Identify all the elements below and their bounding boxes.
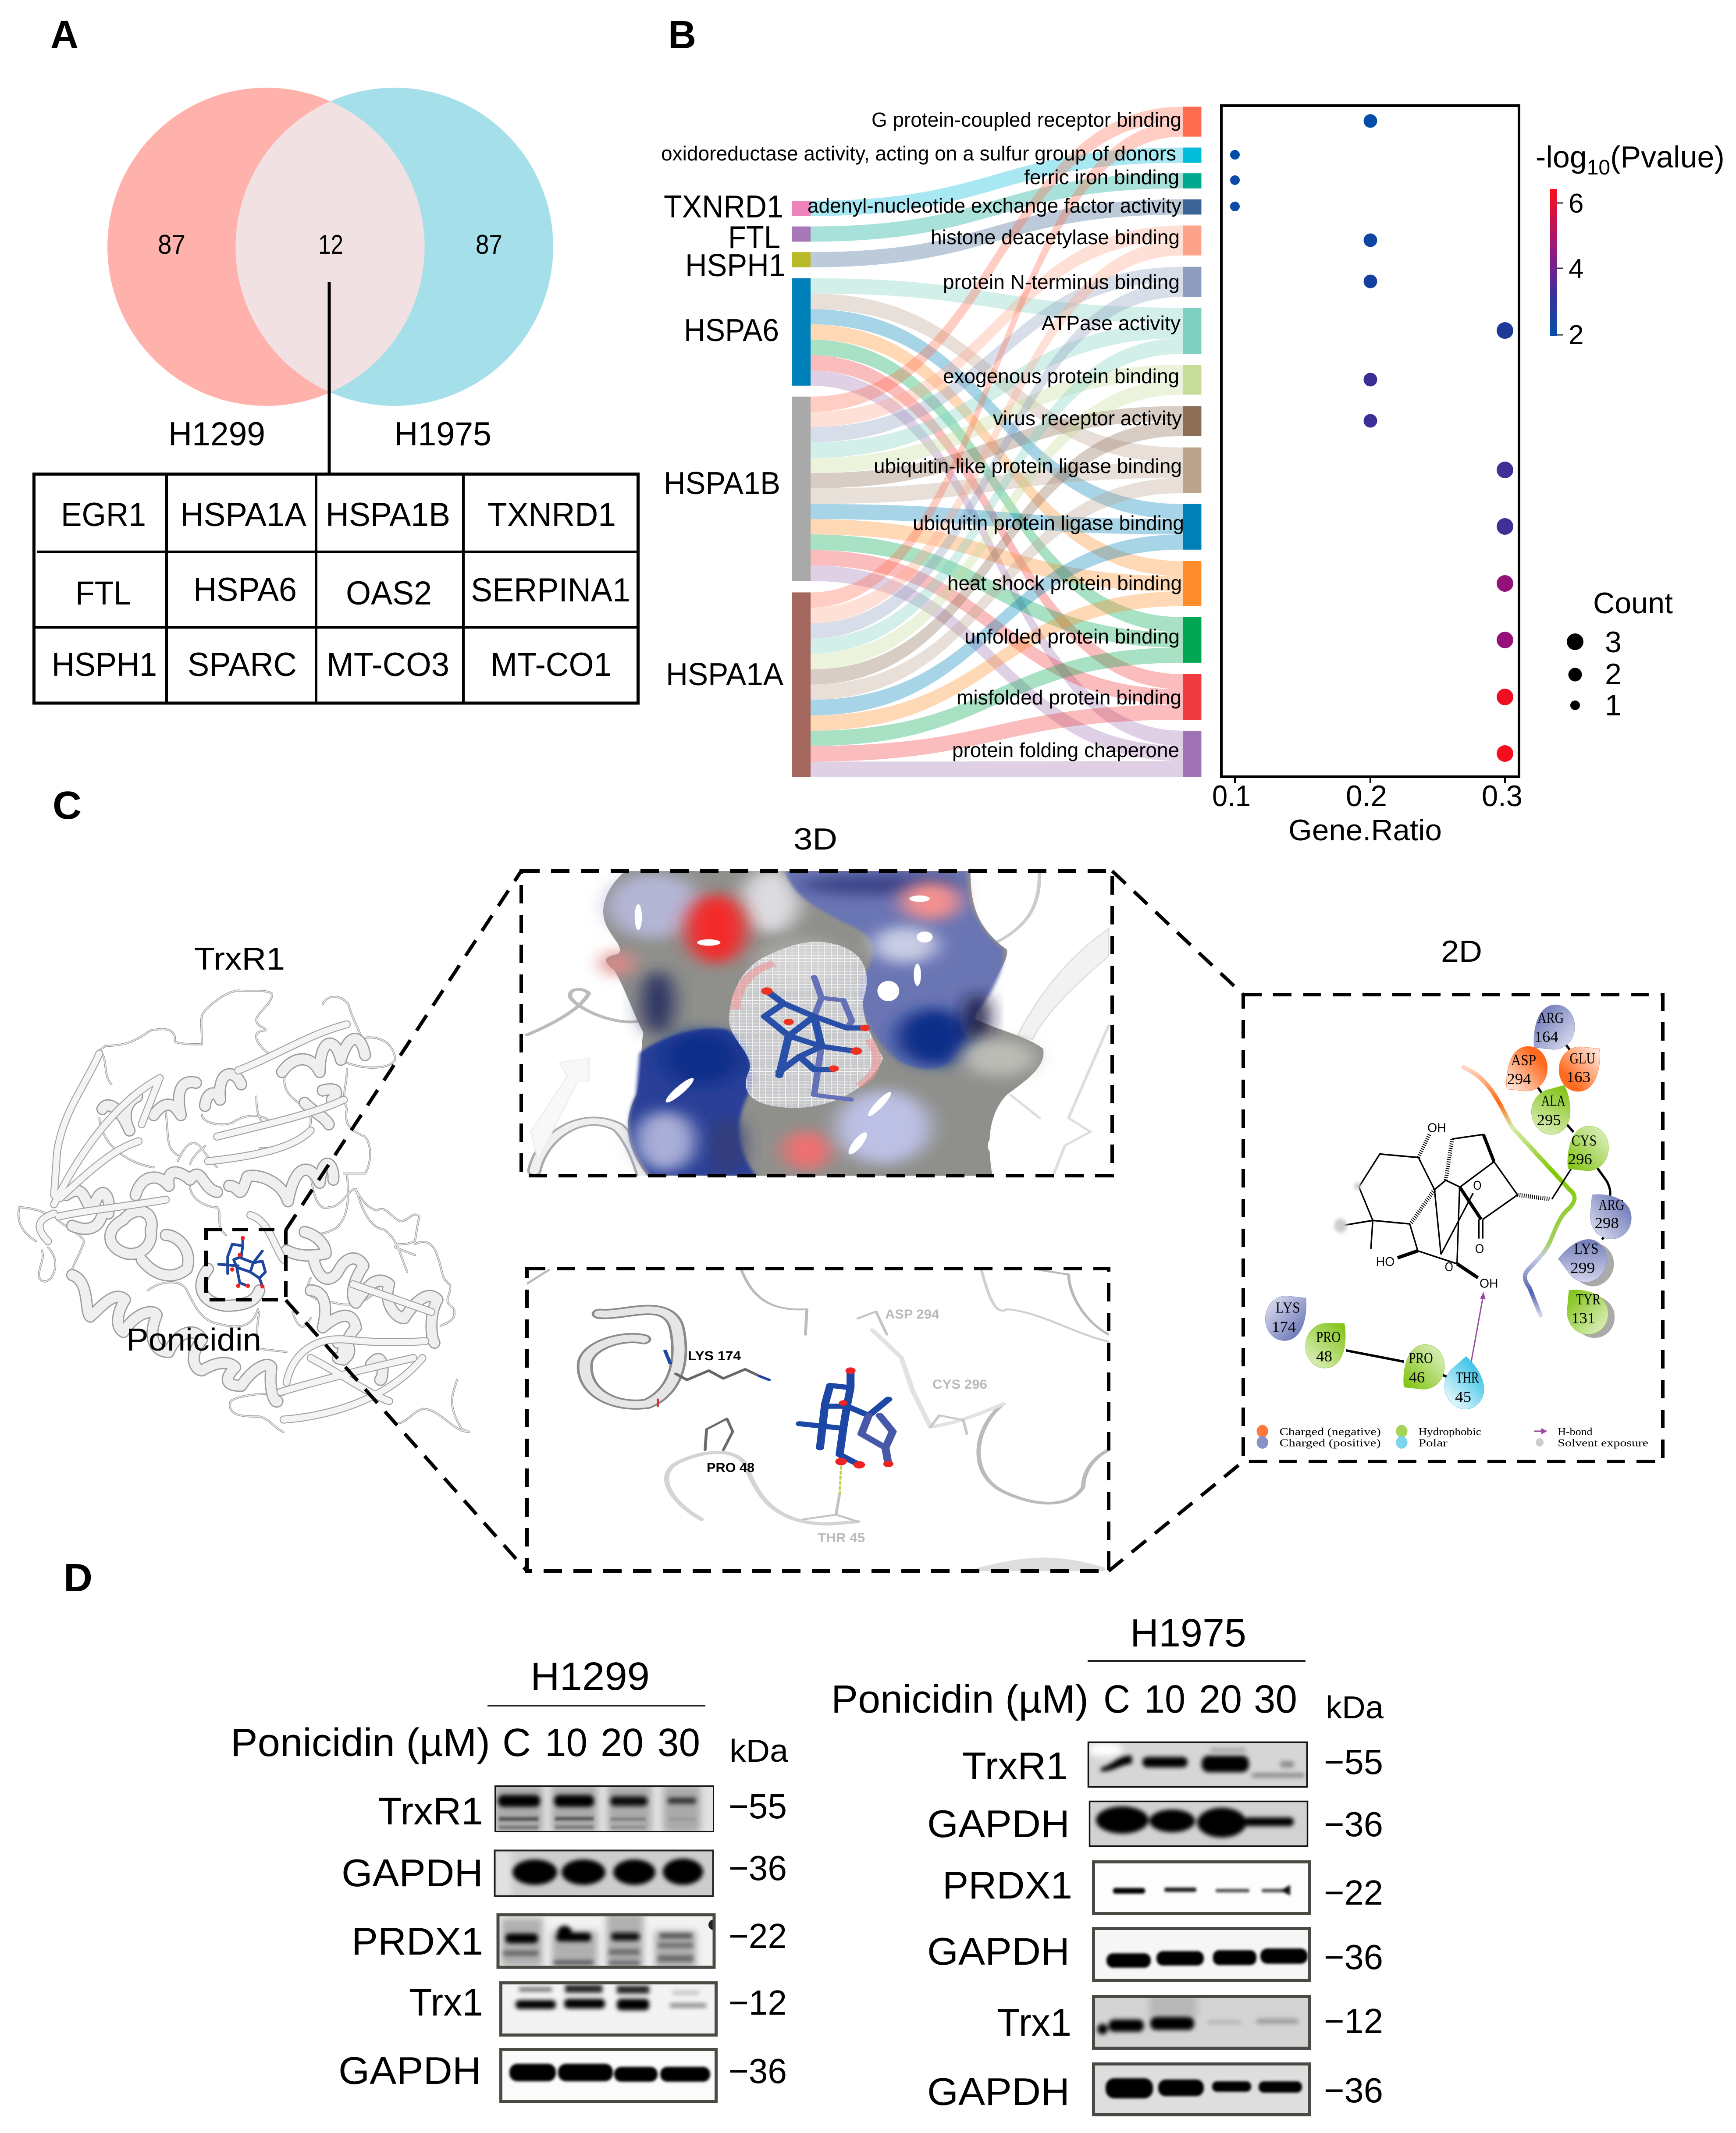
ligand atom labels: OH [1480, 1276, 1498, 1290]
residue labels: LYS 174 [688, 1349, 741, 1363]
detail box outline [527, 1269, 1109, 1571]
sankey term labels: protein folding chaperone [952, 739, 1179, 761]
gene table: MT-CO1 [491, 646, 612, 683]
row labels: GAPDH [338, 2049, 481, 2092]
header H1975 [831, 1611, 1384, 1725]
gene table: HSPA1B [326, 496, 450, 533]
2D legend: H-bond [1558, 1426, 1593, 1437]
sankey term labels: protein N-terminus binding [943, 270, 1180, 293]
x axis labels [1212, 779, 1523, 813]
gene table: HSPA1A [180, 496, 306, 533]
panel D: H1299 western blots [231, 1655, 789, 2103]
kDa markers: −12 [729, 1983, 787, 2022]
sankey gene nodes [792, 201, 811, 777]
kDa markers: −36 [729, 1849, 787, 1888]
gene table: HSPH1 [52, 646, 157, 683]
blot TrxR1 [1088, 1742, 1308, 1788]
residues: TYR [1576, 1291, 1601, 1308]
sankey gene labels: HSPA1A [666, 657, 783, 692]
row labels: Trx1 [997, 2001, 1071, 2044]
residues [1265, 1005, 1631, 1418]
x axis labels: 0.1 [1212, 779, 1251, 813]
sankey term labels: heat shock protein binding [947, 572, 1182, 594]
ligand atom labels: O [1445, 1260, 1453, 1274]
header H1299: C [502, 1721, 531, 1765]
2D legend: Polar [1419, 1437, 1448, 1448]
row labels: TrxR1 [962, 1744, 1068, 1788]
residue connections [1346, 1041, 1610, 1379]
residues: 163 [1566, 1069, 1590, 1086]
panel letter C: C [53, 784, 82, 828]
ligand zoom box [206, 1230, 286, 1300]
sankey term labels: ferric iron binding [1024, 166, 1179, 188]
2D box outline [1243, 995, 1663, 1461]
sankey term labels: ATPase activity [1042, 312, 1181, 334]
dot plot frame [1221, 106, 1519, 777]
blot TrxR1 [494, 1785, 714, 1832]
sankey term labels: histone deacetylase binding [931, 226, 1180, 249]
colour bar [1550, 188, 1583, 350]
blot Trx1 [499, 1981, 718, 2037]
blot GAPDH [494, 1850, 714, 1897]
gene table: MT-CO3 [327, 646, 449, 683]
zoom connector lines [286, 871, 1243, 1571]
size legend: 3 [1605, 626, 1622, 659]
panel B: dot plot [1212, 106, 1725, 847]
residue labels [688, 1307, 987, 1545]
H-bond arrow [1471, 1292, 1486, 1364]
sankey term labels: misfolded protein binding [957, 686, 1181, 709]
header H1975: C [1103, 1678, 1130, 1721]
residues: 46 [1409, 1369, 1425, 1386]
sankey term labels: adenyl-nucleotide exchange factor activity [808, 194, 1181, 217]
colour legend title: (Pvalue) [1610, 140, 1725, 174]
colour legend title: -log [1536, 140, 1587, 174]
ligand sticks [800, 1367, 893, 1468]
2D legend: Solvent exposure [1558, 1437, 1648, 1448]
residues: PRO [1409, 1350, 1433, 1367]
residue labels: ASP 294 [885, 1307, 939, 1322]
header H1299: Ponicidin (µM) [231, 1721, 490, 1765]
label 3D: 3D [793, 822, 837, 856]
residues: ALA [1541, 1092, 1565, 1109]
sankey term labels: ubiquitin-like protein ligase binding [874, 455, 1182, 477]
sankey term labels: oxidoreductase activity, acting on a sulfur group of donors [661, 142, 1176, 165]
kDa markers [729, 1787, 787, 2090]
size legend: 2 [1605, 658, 1622, 691]
residues: 48 [1316, 1348, 1332, 1365]
residue labels: THR 45 [818, 1531, 865, 1545]
residue labels: PRO 48 [707, 1461, 754, 1475]
colour bar: 2 [1569, 320, 1583, 350]
kDa markers: −36 [729, 2051, 787, 2090]
size legend: Count [1593, 587, 1673, 620]
header H1299: 10 [545, 1721, 587, 1765]
residues: 131 [1571, 1310, 1595, 1327]
ligand atom labels: OH [1427, 1120, 1446, 1135]
kDa markers: −22 [729, 1916, 787, 1955]
row labels: TrxR1 [378, 1789, 483, 1833]
protein structure TrxR1 [18, 991, 469, 1432]
residues: 174 [1272, 1319, 1296, 1336]
ligand atom labels: O [1473, 1178, 1481, 1192]
sankey term nodes [1183, 107, 1201, 777]
panel D: H1975 western blots [831, 1611, 1384, 2116]
residues: 164 [1534, 1029, 1558, 1045]
blot GAPDH [499, 2048, 718, 2103]
2D legend: Charged (negative) [1280, 1426, 1381, 1437]
binding site detail view [527, 1269, 1109, 1571]
sankey term labels: unfolded protein binding [964, 625, 1180, 648]
2D legend [1257, 1425, 1648, 1449]
panel letter D: D [64, 1556, 92, 1600]
residues: 45 [1455, 1389, 1471, 1405]
sankey gene labels: HSPA1B [664, 466, 780, 501]
ligand mesh [729, 942, 883, 1108]
row labels: Trx1 [409, 1980, 483, 2024]
header H1299 [231, 1655, 789, 1769]
row labels: PRDX1 [352, 1920, 483, 1963]
kDa markers: −55 [729, 1787, 787, 1826]
row labels: PRDX1 [943, 1863, 1072, 1907]
surface shading [602, 869, 1036, 1176]
3D box outline [521, 871, 1112, 1176]
label TrxR1: TrxR1 [194, 942, 285, 977]
sankey gene labels: TXNRD1 [664, 189, 783, 224]
label Ponicidin: Ponicidin [126, 1322, 261, 1358]
row labels: GAPDH [342, 1851, 483, 1895]
residues: LYS [1276, 1300, 1300, 1316]
gene table: FTL [75, 575, 131, 612]
venn diagram: 87 [476, 230, 502, 260]
gene table: OAS2 [346, 575, 432, 612]
header H1975: 20 [1199, 1678, 1242, 1721]
gene table: TXNRD1 [487, 496, 616, 533]
header H1299: 20 [601, 1721, 644, 1765]
ligand in protein [219, 1236, 265, 1289]
sankey gene labels [664, 189, 786, 692]
residues: GLU [1569, 1050, 1595, 1067]
residues: ARG [1537, 1010, 1564, 1027]
residues: PRO [1316, 1329, 1341, 1346]
ligand sticks [761, 977, 870, 1099]
residues: 296 [1568, 1151, 1592, 1168]
kDa markers: −36 [1324, 1937, 1383, 1977]
gene table [34, 474, 638, 703]
dots [1230, 114, 1513, 762]
sankey term labels [661, 108, 1184, 761]
sankey gene labels: HSPA6 [684, 313, 779, 348]
residues: ASP [1511, 1052, 1536, 1069]
residues: 299 [1570, 1260, 1595, 1276]
kDa markers: −36 [1324, 2071, 1383, 2110]
ligand atom labels: O [1475, 1241, 1484, 1256]
panel letter A: A [50, 13, 78, 57]
residues: ARG [1598, 1197, 1624, 1214]
header H1975: 10 [1144, 1678, 1185, 1721]
panel B: sankey diagram [661, 107, 1201, 777]
kDa markers: −36 [1324, 1805, 1383, 1844]
2D legend: Charged (positive) [1280, 1437, 1381, 1448]
x axis title: Gene.Ratio [1288, 814, 1442, 847]
label 2D: 2D [1441, 934, 1482, 968]
panel letter B: B [668, 13, 696, 57]
sankey term labels: exogenous protein binding [943, 365, 1179, 387]
header H1975: 30 [1254, 1678, 1297, 1721]
label H1975: H1975 [394, 416, 491, 453]
sankey term labels: G protein-coupled receptor binding [872, 108, 1181, 131]
colour legend title: 10 [1587, 156, 1610, 179]
header H1299: kDa [729, 1734, 789, 1769]
residues: THR [1456, 1369, 1479, 1386]
sankey gene labels: FTL [728, 220, 780, 255]
blot GAPDH [1092, 1927, 1311, 1982]
colour bar: 6 [1569, 188, 1583, 219]
row labels [927, 1744, 1072, 2113]
surface [603, 871, 1043, 1176]
3D surface view [521, 869, 1112, 1176]
ligand structure [1341, 1134, 1571, 1278]
venn diagram: 87 [158, 230, 185, 260]
connector line [328, 282, 331, 474]
sankey term labels: virus receptor activity [993, 407, 1182, 430]
ribbons [527, 1270, 1109, 1571]
header H1975: H1975 [1130, 1611, 1246, 1655]
blot PRDX1 [1092, 1860, 1311, 1915]
gene table: EGR1 [61, 496, 146, 533]
venn diagram [107, 88, 553, 406]
sankey ribbons [811, 107, 1183, 777]
gene table: SPARC [188, 646, 297, 683]
ligand atom labels [1376, 1120, 1498, 1290]
sankey gene labels: HSPH1 [685, 248, 786, 283]
size legend [1567, 587, 1673, 722]
blot Trx1 [1092, 1995, 1311, 2050]
row labels: GAPDH [927, 1930, 1070, 1973]
kDa markers: −22 [1324, 1873, 1383, 1912]
residues: 294 [1507, 1071, 1531, 1088]
header H1299: H1299 [530, 1655, 650, 1699]
background ribbons [527, 873, 1109, 1176]
venn diagram: 12 [318, 230, 343, 260]
blot PRDX1 [497, 1913, 719, 1969]
residues: 298 [1595, 1215, 1619, 1232]
header H1975: kDa [1326, 1690, 1384, 1725]
x axis ticks [1235, 777, 1505, 783]
residues: CYS [1572, 1132, 1597, 1149]
panel A: Venn diagram and gene table [34, 88, 638, 703]
header H1975: Ponicidin (µM) [831, 1678, 1089, 1721]
blot GAPDH [1092, 2062, 1311, 2116]
kDa markers: −12 [1324, 2001, 1383, 2041]
gene table: SERPINA1 [471, 572, 630, 609]
x axis labels: 0.2 [1346, 779, 1387, 813]
ligand atom labels: HO [1376, 1255, 1394, 1269]
row labels [338, 1789, 483, 2092]
row labels: GAPDH [927, 2070, 1070, 2113]
label H1299: H1299 [168, 416, 265, 453]
solvent exposure halos [1334, 1183, 1361, 1233]
kDa markers [1324, 1742, 1383, 2110]
residues: 295 [1537, 1112, 1561, 1129]
colour bar: 4 [1569, 254, 1583, 284]
2D interaction diagram [1243, 995, 1663, 1461]
x axis labels: 0.3 [1482, 779, 1523, 813]
residues: LYS [1574, 1241, 1598, 1257]
sankey term labels: ubiquitin protein ligase binding [913, 512, 1184, 534]
size legend: 1 [1605, 689, 1622, 722]
header H1299: 30 [658, 1721, 700, 1765]
residue labels: CYS 296 [932, 1377, 987, 1392]
gene table: HSPA6 [193, 571, 297, 608]
2D legend: Hydrophobic [1419, 1426, 1481, 1437]
kDa markers: −55 [1324, 1742, 1383, 1781]
blot GAPDH [1089, 1801, 1308, 1847]
interaction ribbon [1463, 1067, 1575, 1315]
row labels: GAPDH [927, 1802, 1070, 1845]
